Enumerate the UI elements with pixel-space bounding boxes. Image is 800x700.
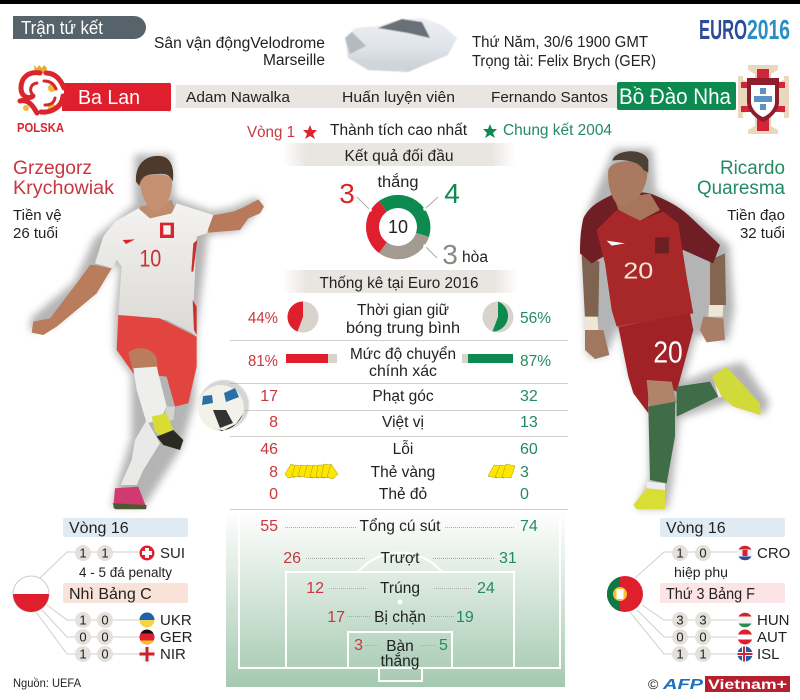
blocked row: [327, 609, 474, 626]
coach band: Fernando Santos: [491, 89, 608, 106]
credit logos: [648, 676, 790, 693]
match date and referee: [472, 34, 656, 70]
name: Quaresma: Quaresma: [697, 178, 785, 199]
pitch panel: [226, 511, 565, 687]
off target row: 26: [283, 550, 301, 567]
match round tag: Trận tứ kết: [21, 18, 103, 38]
panel: Portugal path: 1: [699, 646, 707, 662]
best achievement row: [247, 122, 612, 141]
passing accuracy row: 81%: [248, 353, 278, 370]
heading: head to head: [283, 143, 515, 166]
corners row: [260, 388, 538, 405]
fouls row: 60: [520, 441, 538, 458]
panel: Portugal path: Thứ 3 Bảng F: [666, 586, 755, 603]
coach band: [175, 85, 620, 108]
panel: Poland path: 1: [79, 546, 87, 560]
red cards row: 0: [269, 486, 278, 503]
corners row: Phạt góc: [372, 388, 434, 405]
donut chart: head to head: hòa: [462, 249, 488, 266]
match date and referee: Thứ Năm, 30/6 1900 GMT: [472, 34, 649, 51]
panel: Poland path: 0: [79, 630, 87, 644]
yellow cards row: Thẻ vàng: [371, 464, 435, 481]
credit logos: ©: [648, 676, 659, 692]
player: Krychowiak: [30, 155, 264, 509]
panel: Poland path: NIR: [160, 646, 186, 663]
yellow cards row: 3: [520, 464, 529, 481]
corners row: 32: [520, 388, 538, 405]
fouls row: Lỗi: [393, 441, 413, 458]
total shots row: [260, 518, 538, 535]
credit logos: Vietnam+: [708, 676, 787, 692]
name: Quaresma: Ricardo: [720, 158, 785, 179]
total shots row: 74: [520, 518, 538, 535]
best achievement row: Vòng 1: [247, 124, 295, 141]
coach band: Huấn luyện viên: [342, 89, 455, 106]
panel: Portugal path: 3: [699, 612, 707, 628]
panel: Poland path: SUI: [160, 545, 185, 562]
possession row: 56%: [520, 310, 551, 327]
venue text: [154, 35, 325, 69]
venue text: Sân vận độngVelodrome: [154, 35, 325, 52]
yellow cards row: 8: [269, 464, 278, 481]
donut chart: head to head: 10: [388, 217, 408, 237]
fouls row: [260, 441, 538, 458]
name: Krychowiak: Grzegorz: [13, 158, 92, 179]
total shots row: Tổng cú sút: [360, 518, 441, 535]
on target row: 24: [477, 580, 495, 597]
panel: Portugal path: 0: [699, 546, 707, 560]
possession row: [248, 301, 551, 337]
player: Quaresma: [580, 149, 769, 509]
panel: Poland path: Vòng 16: [69, 520, 129, 537]
player: Quaresma: 20: [653, 336, 683, 370]
blocked row: Bị chặn: [374, 609, 426, 626]
yellow cards row: [269, 464, 529, 481]
panel: Poland path: 0: [101, 630, 109, 644]
goals row: Bàn: [386, 638, 414, 655]
passing accuracy row: chính xác: [369, 363, 437, 380]
panel: Poland path: 1: [79, 646, 87, 662]
best achievement row: Thành tích cao nhất: [330, 122, 468, 139]
panel: Poland path: 1: [79, 612, 87, 628]
panel: Portugal path: 1: [676, 646, 684, 662]
passing accuracy row: Mức độ chuyển: [350, 346, 456, 363]
name: Quaresma: Tiền đạo: [727, 207, 785, 224]
possession row: Thời gian giữ: [357, 302, 449, 319]
donut chart: head to head: 3: [442, 239, 458, 270]
red cards row: 0: [520, 486, 529, 503]
offsides row: 8: [269, 414, 278, 431]
panel: Poland path: 0: [101, 612, 109, 628]
team bar: Poland: Ba Lan: [78, 87, 140, 109]
venue text: Marseille: [263, 52, 325, 69]
possession row: bóng trung bình: [346, 320, 460, 337]
panel: Portugal path: ISL: [757, 646, 780, 663]
panel: Poland path: Nhì Bảng C: [69, 586, 152, 603]
heading: head to head: Kết quả đối đầu: [344, 148, 454, 165]
icon: Portugal flag: [607, 576, 643, 612]
panel: Poland path: 4 - 5 đá penalty: [79, 565, 172, 580]
off target row: Trượt: [381, 550, 420, 567]
panel: Portugal path: hiệp phụ: [674, 565, 728, 580]
passing accuracy row: [248, 346, 551, 380]
blocked row: 19: [456, 609, 474, 626]
panel: Poland path: GER: [160, 629, 193, 646]
panel: Poland path: 1: [101, 546, 109, 560]
heading: Euro stats: [283, 270, 518, 293]
panel: Portugal path: 3: [676, 612, 684, 628]
red cards row: [269, 486, 529, 503]
fouls row: 46: [260, 441, 278, 458]
offsides row: 13: [520, 414, 538, 431]
source note: Nguồn: UEFA: [13, 676, 81, 690]
icon: stadium: [345, 18, 457, 72]
name: Krychowiak: 26 tuổi: [13, 225, 58, 242]
player: Krychowiak: 10: [139, 246, 161, 273]
panel: Portugal path: HUN: [757, 612, 790, 629]
total shots row: 55: [260, 518, 278, 535]
panel: Portugal path: [607, 518, 790, 663]
panel: Portugal path: 0: [699, 630, 707, 644]
donut chart: head to head: 4: [444, 178, 460, 209]
name: Krychowiak: Krychowiak: [13, 178, 115, 199]
name: Krychowiak: [13, 158, 115, 242]
goals row: 3: [354, 637, 363, 654]
Euro 2016 logo: EURO: [699, 14, 747, 45]
panel: Poland path: 0: [101, 646, 109, 662]
on target row: [306, 580, 495, 597]
passing accuracy row: 87%: [520, 353, 551, 370]
offsides row: Việt vị: [382, 414, 424, 431]
ball: [198, 380, 249, 431]
possession row: 44%: [248, 310, 278, 327]
donut chart: head to head: [339, 174, 488, 270]
coach band: Adam Nawalka: [186, 89, 291, 106]
icon: Poland federation logo: [17, 65, 65, 135]
name: Quaresma: 32 tuổi: [740, 225, 785, 242]
offsides row: [269, 414, 538, 431]
panel: Poland path: UKR: [160, 612, 192, 629]
credit logos: AFP: [662, 676, 704, 693]
heading: Euro stats: Thống kê tại Euro 2016: [320, 275, 478, 292]
player: Quaresma: 20: [623, 257, 653, 283]
donut chart: head to head: thắng: [378, 174, 418, 191]
team bar: Portugal: Bồ Đào Nha: [619, 84, 732, 109]
goals row: 5: [439, 637, 448, 654]
best achievement row: Chung kết 2004: [503, 122, 612, 139]
corners row: 17: [260, 388, 278, 405]
blocked row: 17: [327, 609, 345, 626]
icon: Poland federation logo: POLSKA: [17, 120, 65, 135]
match round tag: [13, 16, 146, 39]
panel: Portugal path: Vòng 16: [666, 520, 726, 537]
on target row: 12: [306, 580, 324, 597]
name: Krychowiak: Tiền vệ: [13, 207, 62, 224]
icon: Portugal federation crest: [738, 65, 789, 134]
icon: Poland flag: [13, 576, 49, 612]
match date and referee: Trọng tài: Felix Brych (GER): [472, 53, 656, 70]
panel: Portugal path: CRO: [757, 545, 790, 562]
donut chart: head to head: 3: [339, 178, 355, 209]
goals row: [354, 637, 448, 670]
off target row: 31: [499, 550, 517, 567]
on target row: Trúng: [380, 580, 420, 597]
panel: Portugal path: 1: [676, 546, 684, 560]
red cards row: Thẻ đỏ: [379, 486, 427, 503]
name: Quaresma: [697, 158, 785, 242]
panel: Portugal path: AUT: [757, 629, 787, 646]
off target row: [283, 550, 517, 567]
panel: Poland path: [13, 518, 193, 663]
team bar: Poland: [62, 83, 171, 111]
goals row: thắng: [381, 653, 419, 670]
panel: Portugal path: 0: [676, 630, 684, 644]
